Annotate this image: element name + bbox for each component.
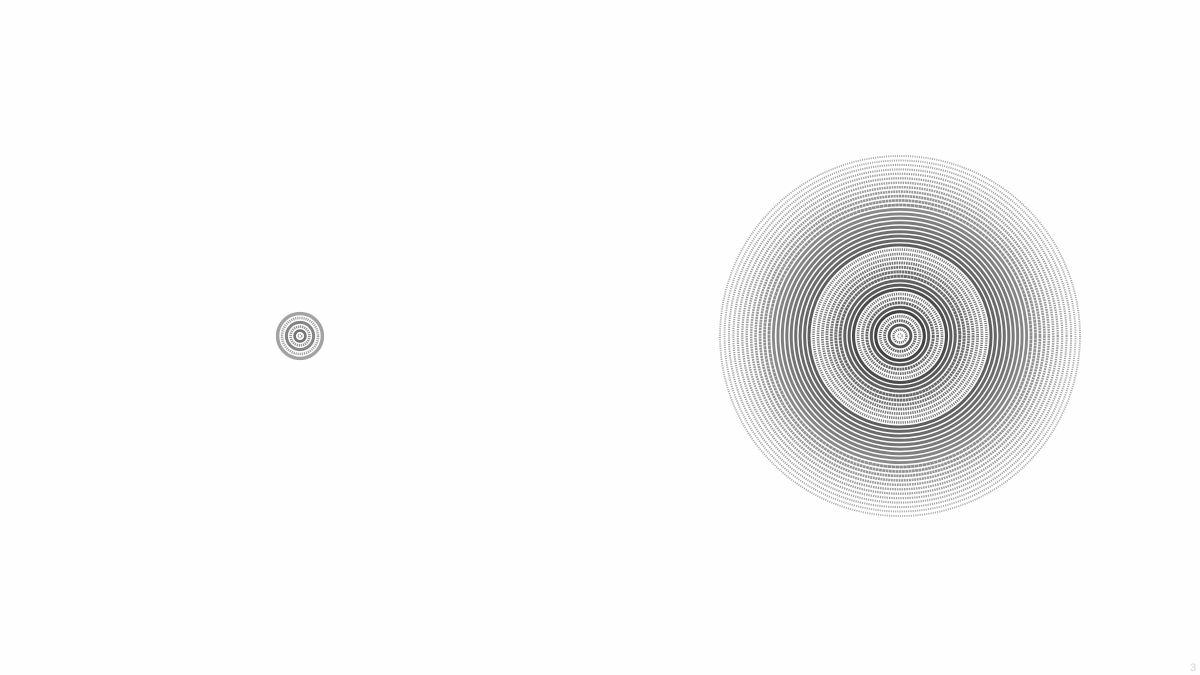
large concentric circle bbox=[720, 156, 1080, 516]
small concentric circle bbox=[278, 314, 322, 358]
page number: 3 bbox=[1190, 662, 1196, 674]
